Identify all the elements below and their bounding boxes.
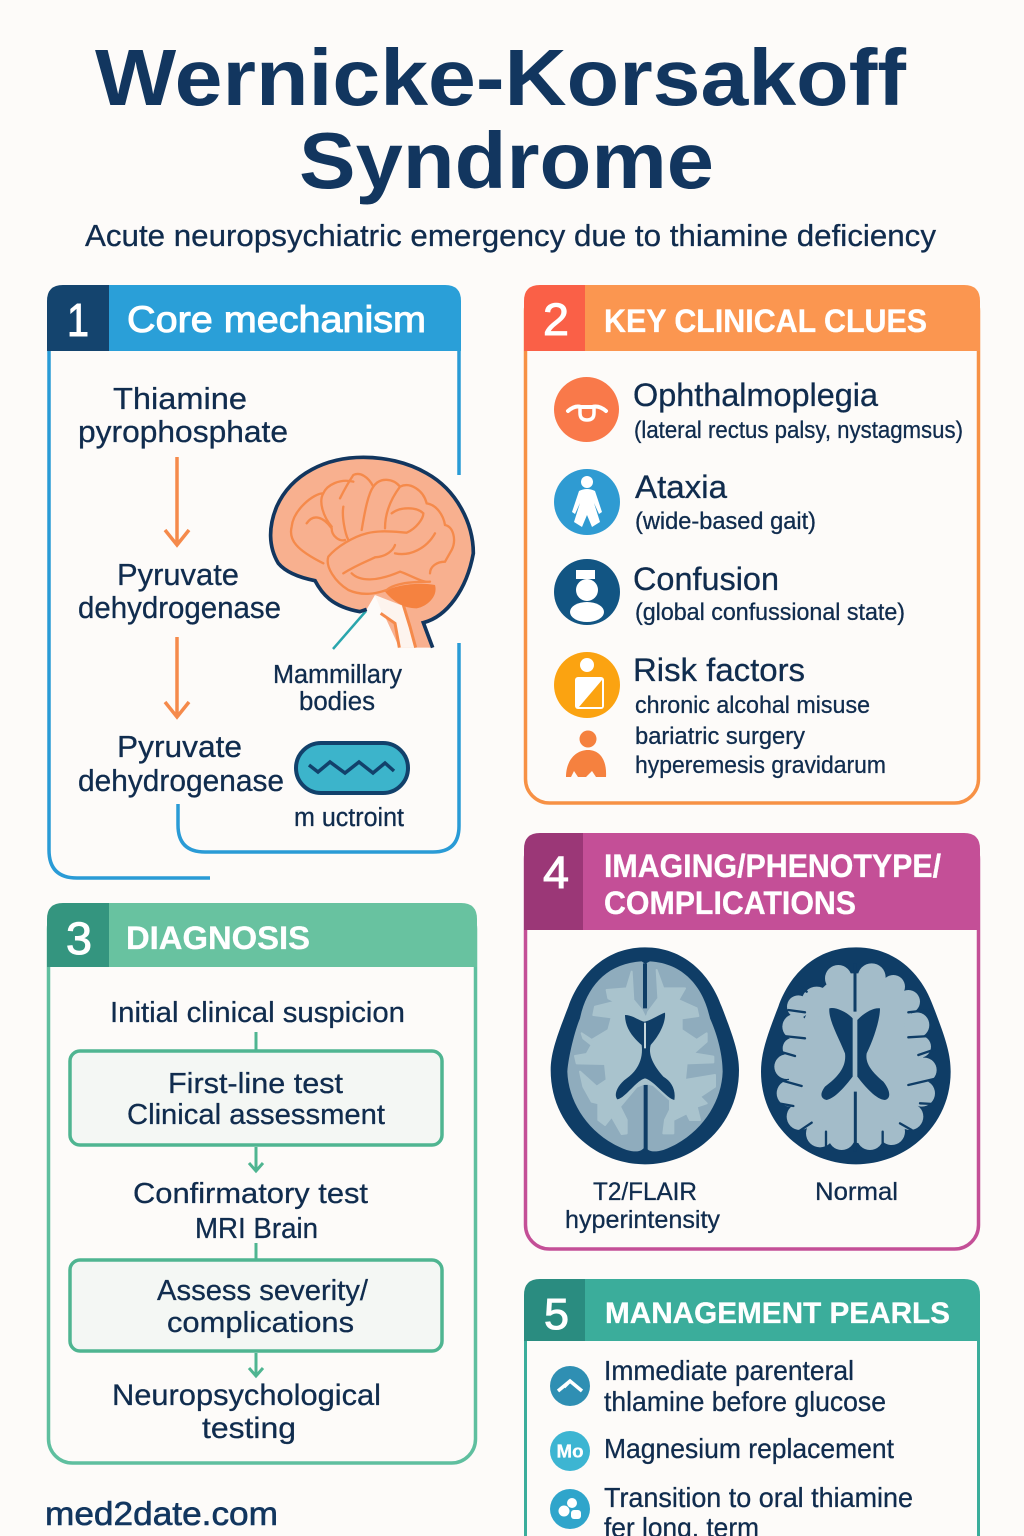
panel 2 header xyxy=(524,285,980,351)
text: thiamine pyrophosphate: pyrophosphate xyxy=(78,414,288,449)
arrow: to confirmatory test xyxy=(249,1147,263,1171)
pointer: mammillary bodies xyxy=(333,611,366,649)
clue: confusion: (global confussional state) xyxy=(635,599,905,626)
box: assess severity: Assess severity/ xyxy=(157,1275,369,1307)
pearl: oral thiamine: Transition to oral thiamine xyxy=(604,1482,913,1513)
icon: pills xyxy=(550,1489,590,1529)
clue: risk factors: hyperemesis gravidarum xyxy=(635,752,886,779)
pearl: parenteral thiamine: thlamine before glucose xyxy=(604,1386,886,1417)
panel 1 header: 1 xyxy=(67,294,89,346)
subtitle: Acute neuropsychiatric emergency due to thiamine deficiency xyxy=(85,218,936,253)
panel 1 header xyxy=(47,285,461,351)
pearl: oral thiamine xyxy=(550,1482,913,1536)
text: neuropsychological testing: Neuropsychological xyxy=(112,1379,381,1412)
text: thiamine pyrophosphate: Thiamine xyxy=(113,381,247,416)
panel 5 header xyxy=(524,1279,980,1341)
panel 5 header: MANAGEMENT PEARLS xyxy=(605,1297,950,1330)
icon: Mo badge xyxy=(550,1431,590,1471)
text: neuropsychological testing: testing xyxy=(202,1412,296,1445)
panel 2 outline xyxy=(526,287,978,803)
clue: ataxia: Ataxia xyxy=(635,469,727,505)
box: first-line test xyxy=(70,1051,442,1145)
title: Wernicke-Korsakoff xyxy=(95,33,906,122)
panel: diagnosis xyxy=(47,903,477,1463)
title: Syndrome xyxy=(299,116,714,205)
panel: management pearls xyxy=(524,1279,980,1536)
panel 3 header: 3 xyxy=(66,913,92,964)
box: assess severity: complications xyxy=(167,1307,354,1339)
text: pyruvate dehydrogenase second: dehydrogenase xyxy=(78,763,284,798)
pearl: magnesium: Magnesium replacement xyxy=(604,1433,894,1464)
box: first-line test: Clinical assessment xyxy=(127,1099,385,1131)
icon: figure xyxy=(554,469,620,535)
icon: micronutrient capsule xyxy=(296,743,408,793)
clue: ophthalmoplegia xyxy=(554,377,963,444)
box: assess severity xyxy=(70,1260,442,1351)
title xyxy=(95,33,906,205)
panel 4 header xyxy=(524,833,980,930)
panel: core mechanism xyxy=(47,285,473,878)
panel: key clinical clues xyxy=(524,285,980,803)
text: confirmatory test: MRI Brain xyxy=(195,1213,318,1245)
text: initial clinical suspicion: Initial clinical suspicion xyxy=(110,997,405,1029)
connector xyxy=(254,1032,258,1050)
panel 3 outline xyxy=(48,905,476,1463)
panel 3 header xyxy=(47,903,477,967)
arrow: to neuropsychological testing xyxy=(249,1353,263,1376)
clue: ophthalmoplegia: Ophthalmoplegia xyxy=(633,377,878,413)
panel: imaging xyxy=(524,833,980,1249)
text: pyruvate dehydrogenase second: Pyruvate xyxy=(117,729,242,764)
panel 3 header: DIAGNOSIS xyxy=(126,920,310,956)
footer: source: med2date.com xyxy=(45,1495,278,1532)
text: thiamine pyrophosphate xyxy=(78,381,288,449)
pearl: parenteral thiamine: Immediate parenteral xyxy=(604,1355,854,1386)
clue: ataxia xyxy=(554,469,816,535)
clue: risk factors: Risk factors xyxy=(633,652,805,688)
panel 5 outline xyxy=(526,1300,978,1536)
pearl: magnesium xyxy=(550,1431,894,1471)
scan: T2/FLAIR hyperintensity xyxy=(551,947,739,1164)
clue: risk factors: bariatric surgery xyxy=(635,723,805,750)
icon: Mo badge: Mo xyxy=(556,1442,584,1462)
connector xyxy=(254,1243,258,1260)
icon: clipboard figure xyxy=(554,652,620,718)
icon: person xyxy=(566,730,606,777)
label: T2/FLAIR hyperintensity xyxy=(565,1178,721,1234)
label: normal: Normal xyxy=(815,1178,898,1206)
text: confirmatory test xyxy=(133,1178,368,1245)
text: neuropsychological testing xyxy=(112,1379,381,1445)
arrow: first pathway step xyxy=(165,457,189,545)
panel 4 header: IMAGING/PHENOTYPE/ xyxy=(604,848,941,884)
panel 4 header: 4 xyxy=(543,847,569,898)
clue: confusion xyxy=(554,559,905,626)
label: micronutrient: m uctroint xyxy=(294,804,404,832)
panel 4 header: COMPLICATIONS xyxy=(604,885,856,921)
panel 1 outline xyxy=(49,345,459,878)
clue: ophthalmoplegia: (lateral rectus palsy, nystagmsus) xyxy=(634,417,963,444)
icon: eye xyxy=(554,377,619,442)
label: mammillary bodies: Mammillary xyxy=(273,661,402,689)
scan: normal xyxy=(761,947,951,1164)
text: pyruvate dehydrogenase second xyxy=(78,729,284,798)
panel 4 outline xyxy=(526,835,978,1249)
pearl: parenteral thiamine xyxy=(550,1355,886,1417)
text: pyruvate dehydrogenase: Pyruvate xyxy=(117,557,239,592)
label: T2/FLAIR hyperintensity: hyperintensity xyxy=(565,1206,721,1234)
clue: risk factors: chronic alcohal misuse xyxy=(635,692,870,719)
panel 2 header: 2 xyxy=(543,294,569,345)
icon: arrow mark xyxy=(550,1366,590,1406)
text: confirmatory test: Confirmatory test xyxy=(133,1178,368,1210)
icon: brain xyxy=(271,457,473,648)
panel 2 header: KEY CLINICAL CLUES xyxy=(604,303,927,339)
panel 5 header: 5 xyxy=(544,1290,569,1339)
icon: head figure xyxy=(554,559,620,625)
text: pyruvate dehydrogenase xyxy=(78,557,281,625)
arrow: second pathway step xyxy=(165,637,189,717)
clue: risk factors xyxy=(554,652,886,779)
label: mammillary bodies xyxy=(273,661,402,716)
panel 1 header: Core mechanism xyxy=(127,299,426,340)
clue: ataxia: (wide-based gait) xyxy=(635,508,816,535)
label: mammillary bodies: bodies xyxy=(299,688,375,716)
label: T2/FLAIR hyperintensity: T2/FLAIR xyxy=(593,1178,697,1206)
clue: confusion: Confusion xyxy=(633,561,779,597)
box: first-line test: First-line test xyxy=(168,1068,343,1100)
text: pyruvate dehydrogenase: dehydrogenase xyxy=(78,590,281,625)
